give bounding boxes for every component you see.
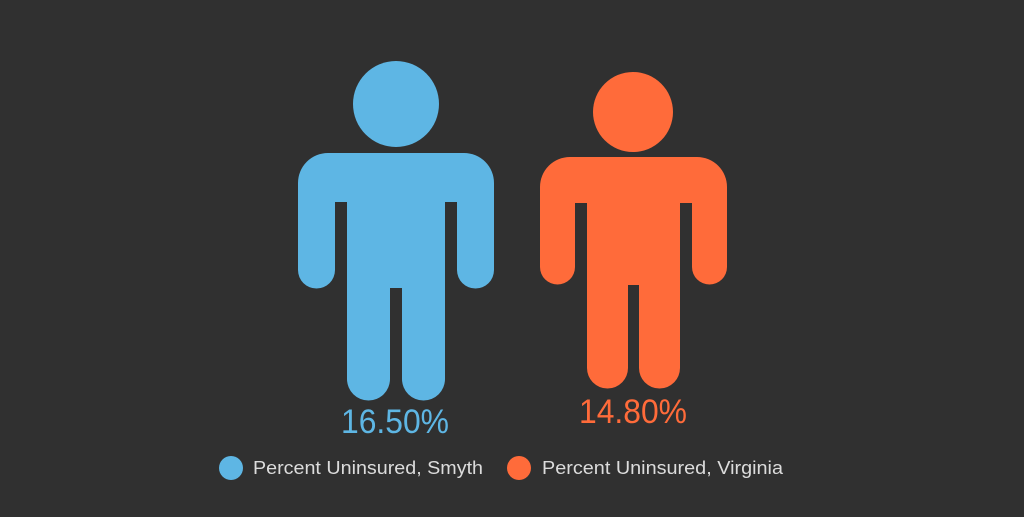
value: Virginia: 14.80% [579, 393, 687, 431]
value: Smyth: 16.50% [341, 403, 449, 441]
legend item: Virginia [507, 456, 784, 480]
figure: Virginia person icon [540, 72, 727, 388]
legend [219, 456, 784, 480]
legend item: Smyth [219, 456, 483, 480]
figure: Smyth person icon [298, 61, 494, 400]
legend item: Virginia: Percent Uninsured, Virginia [542, 458, 784, 478]
legend item: Smyth: Percent Uninsured, Smyth [253, 458, 483, 478]
